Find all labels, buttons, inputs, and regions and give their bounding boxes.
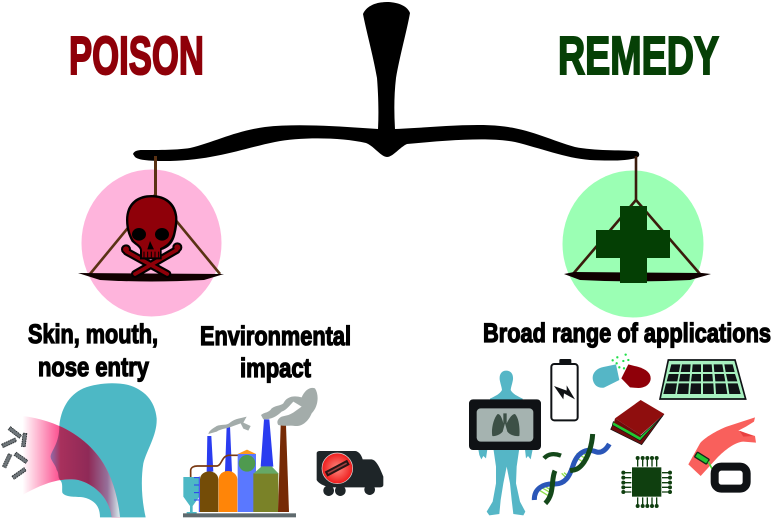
label: environmental impact — [200, 321, 351, 383]
icon: stacked layers — [611, 400, 664, 445]
right scale pan — [564, 156, 711, 282]
icon: solar panel — [660, 360, 746, 399]
title: poison: POISON — [69, 26, 204, 86]
icon: capsule — [593, 353, 651, 388]
left scale pan — [78, 156, 224, 282]
icon: microchip — [621, 456, 672, 508]
icon: head with exposure beam — [23, 383, 157, 517]
icon: green cross — [596, 206, 670, 283]
label: skin mouth nose entry — [28, 319, 158, 382]
balance beam and post — [133, 2, 639, 161]
icon: factory — [183, 419, 296, 517]
icon: truck with nano label — [317, 451, 383, 496]
icon: nanoparticles — [2, 427, 28, 479]
icon: hand with wearable sensor — [688, 417, 756, 489]
label: environmental impact: impact — [240, 353, 311, 383]
icon: skull and crossbones — [121, 195, 182, 274]
right circle — [562, 170, 704, 318]
left circle — [82, 170, 222, 316]
label: environmental impact: Environmental — [200, 321, 351, 351]
label: skin mouth nose entry: Skin, mouth, — [28, 319, 158, 349]
icon: smoke — [208, 388, 318, 434]
icon: battery — [551, 359, 578, 420]
icon: body with x-ray — [469, 371, 541, 515]
icon: dna helix — [534, 434, 609, 503]
label: skin mouth nose entry: nose entry — [38, 352, 149, 382]
